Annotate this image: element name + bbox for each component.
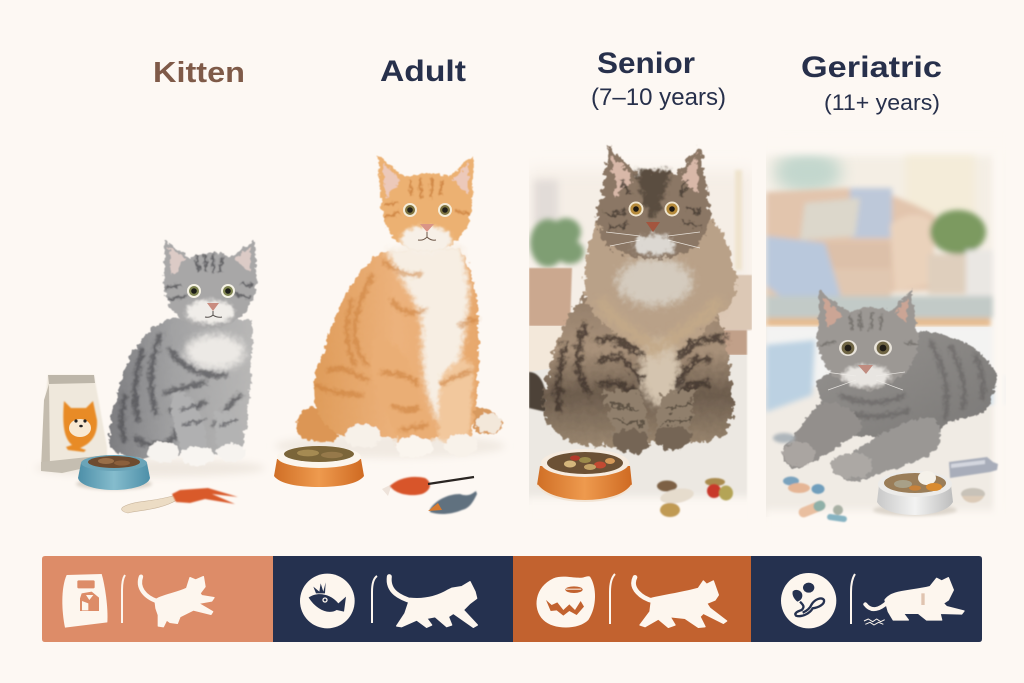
icon: walking cat silhouette (389, 577, 477, 627)
heading: Kitten: Kitten (153, 57, 245, 89)
senior room background (529, 168, 752, 498)
bottom icon bar (42, 556, 982, 642)
icon: feather toy (122, 488, 238, 513)
adult fur (297, 155, 503, 458)
icon: resting cat silhouette (864, 578, 964, 625)
panel: adult cat illustration (274, 155, 505, 514)
panel: senior cat illustration (525, 146, 759, 527)
icon: food bag (62, 574, 108, 628)
icon: walking senior cat silhouette (634, 577, 727, 627)
panel: geriatric cat illustration (766, 152, 999, 523)
icon: senior food bowl (537, 449, 632, 501)
icon: kitten food bowl (76, 455, 152, 490)
icon: medicine bottle (949, 457, 998, 478)
geriatric fur (783, 290, 998, 481)
icon: geriatric food bowl (873, 471, 957, 516)
icon: playful kitten silhouette (140, 577, 214, 627)
icon: supplements badge (781, 573, 836, 628)
adult face (403, 203, 452, 240)
heading: Adult: Adult (380, 55, 466, 88)
divider (610, 574, 615, 624)
geriatric cat (783, 290, 998, 481)
kitten fur (109, 240, 256, 466)
heading: Geriatric with age range: Geriatric (801, 51, 942, 84)
icon: food bowl badge (537, 576, 595, 627)
divider (851, 574, 855, 624)
floor shadow (35, 459, 265, 477)
senior fur (543, 146, 736, 453)
panel: kitten illustration (35, 240, 265, 513)
icon: blurred item on the rug (773, 433, 795, 443)
geriatric face (825, 340, 905, 390)
heading: Geriatric with age range: (11+ years) (824, 90, 940, 115)
kitten face (187, 284, 235, 317)
geriatric room background (766, 152, 996, 511)
icon: scattered pills (783, 476, 847, 522)
icon: adult food bowl (274, 446, 364, 487)
kitten cat (109, 240, 256, 466)
icon: scattered senior kibble (657, 478, 733, 517)
heading: Senior with age range: Senior (597, 47, 695, 80)
icon: fish badge (300, 574, 355, 628)
divider (372, 576, 377, 623)
adult cat (297, 155, 503, 458)
bar segment: geriatric (751, 556, 982, 642)
icon: grey toy mouse (428, 491, 477, 514)
bar segment: adult (273, 556, 513, 642)
bar segment: kitten (42, 556, 273, 642)
icon: kitten food bag (41, 375, 107, 473)
icon: red fish toy on a stick (382, 477, 474, 496)
heading: Geriatric with age range (801, 51, 942, 115)
heading: Senior with age range: (7–10 years) (591, 84, 726, 111)
heading: Senior with age range (591, 47, 726, 111)
floor shadow (275, 434, 505, 458)
senior cat (543, 146, 736, 453)
senior face (606, 202, 700, 248)
divider (122, 575, 125, 623)
bar segment: senior (513, 556, 751, 642)
icon: small medicine cup (961, 488, 985, 503)
